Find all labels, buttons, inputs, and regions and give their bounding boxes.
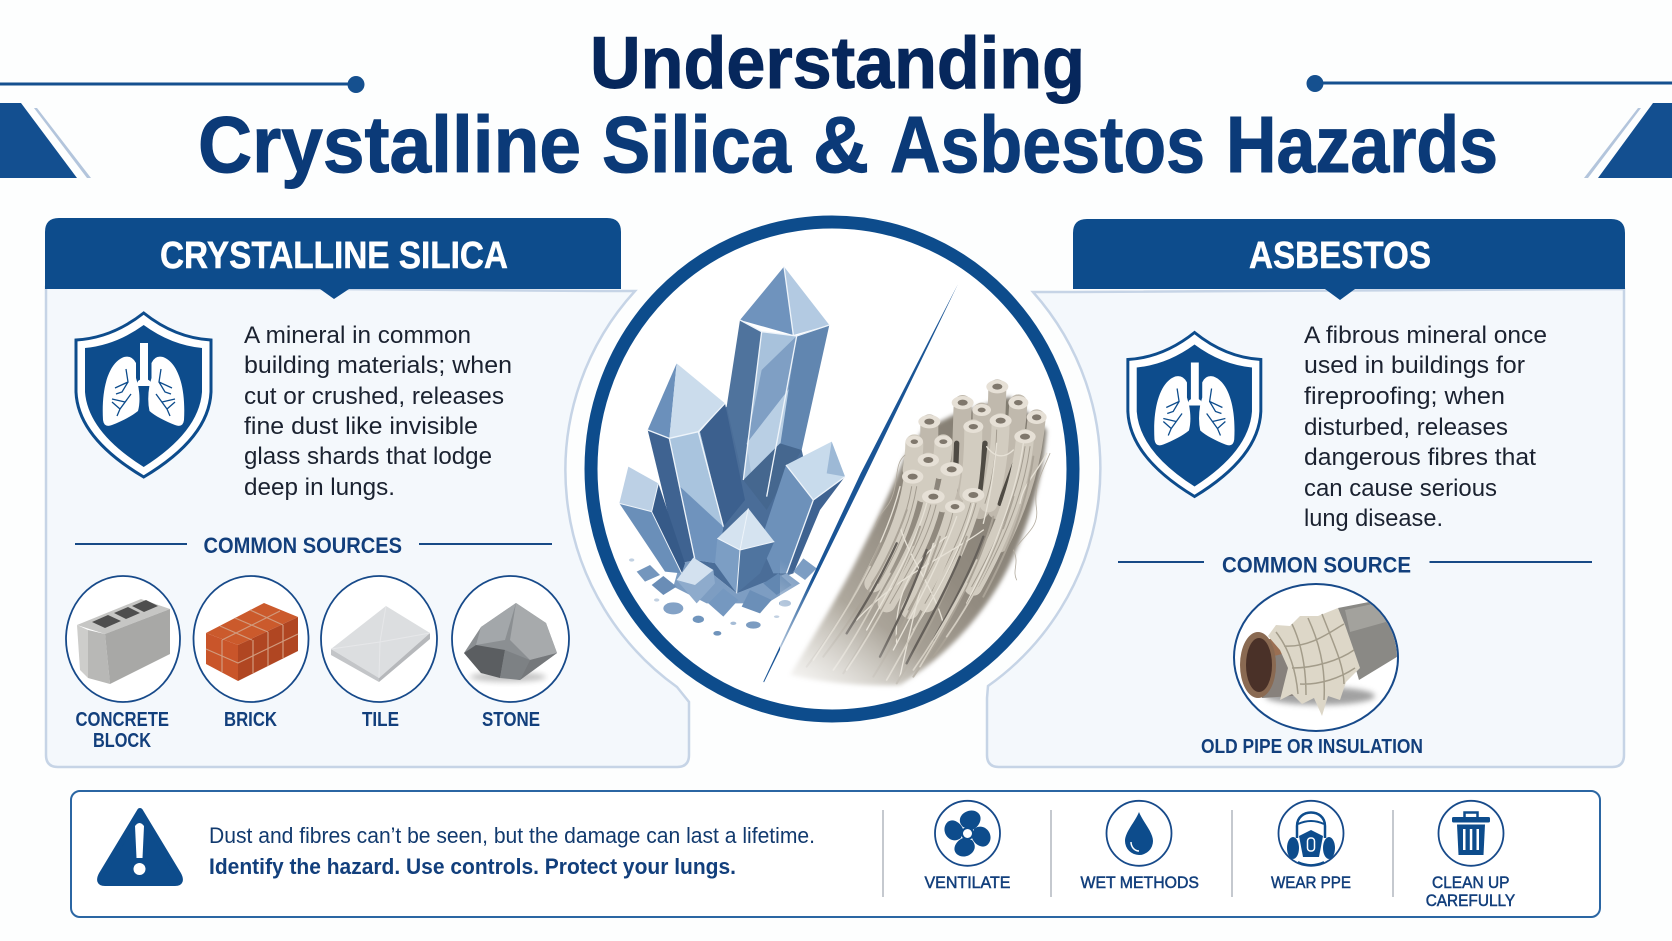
label: BLOCK xyxy=(93,730,151,752)
text: silica description: cut or crushed, releases xyxy=(244,383,504,410)
text: asbestos description: lung disease. xyxy=(1304,505,1443,532)
text: silica description: A mineral in common xyxy=(244,322,471,349)
title: Understanding xyxy=(590,23,1085,104)
title: & xyxy=(813,100,869,189)
panel background: asbestos xyxy=(987,289,1624,767)
text: silica description: deep in lungs. xyxy=(244,474,395,501)
divider line xyxy=(763,284,958,682)
label: STONE xyxy=(482,709,540,731)
source: brick xyxy=(194,576,308,731)
text: silica description: glass shards that lodge xyxy=(244,443,492,470)
label: CONCRETE xyxy=(76,709,169,731)
label xyxy=(76,709,169,752)
title: Silica xyxy=(602,100,791,189)
panel: crystalline silica xyxy=(45,218,689,767)
text: silica description: fine dust like invisible xyxy=(244,413,478,440)
label xyxy=(1426,873,1515,910)
text: asbestos description: fireproofing; when xyxy=(1304,383,1505,410)
heading: crystalline silica: CRYSTALLINE SILICA xyxy=(160,235,508,277)
heading: asbestos xyxy=(1073,219,1625,300)
fibre strands xyxy=(833,443,1047,677)
text: silica description xyxy=(244,322,512,501)
icon: ventilate xyxy=(924,801,1010,892)
icon: lung shield xyxy=(76,313,211,477)
callout: bottom banner xyxy=(71,791,1600,917)
bottom fade xyxy=(780,566,924,688)
front crystal xyxy=(717,508,774,550)
panel: asbestos xyxy=(987,219,1625,767)
text: asbestos description: dangerous fibres that xyxy=(1304,444,1536,471)
panel background: silica xyxy=(46,287,689,767)
icon: warning triangle xyxy=(100,811,180,883)
label: VENTILATE xyxy=(924,873,1010,892)
text: warning message xyxy=(209,823,815,879)
heading: crystalline silica xyxy=(45,218,621,299)
text: asbestos description: disturbed, releases xyxy=(1304,414,1508,441)
title: Hazards xyxy=(1226,100,1498,189)
text: warning message: Identify the hazard. Use controls. Protect your lungs. xyxy=(209,854,736,879)
icon: wear ppe xyxy=(1271,801,1351,892)
text: asbestos description: can cause serious xyxy=(1304,475,1497,502)
title xyxy=(198,23,1498,189)
heading: common sources: COMMON SOURCES xyxy=(204,533,402,558)
tube ribs xyxy=(872,430,1030,610)
back tubes xyxy=(927,388,1037,543)
label: WEAR PPE xyxy=(1271,873,1351,892)
front tubes xyxy=(873,422,1025,610)
ring xyxy=(591,222,1073,716)
left header ornament xyxy=(0,76,364,178)
source: concrete block xyxy=(66,576,180,752)
text: asbestos description: used in buildings for xyxy=(1304,352,1525,379)
right crystal xyxy=(760,465,813,573)
illustration: silica crystals xyxy=(619,267,845,636)
illustration: asbestos fibres xyxy=(780,380,1050,697)
big crystal xyxy=(740,267,793,335)
label: BRICK xyxy=(224,709,277,731)
text: silica description: building materials; when xyxy=(244,352,512,379)
crystal mass xyxy=(695,407,813,593)
icon: wet methods xyxy=(1080,801,1199,892)
source: old pipe xyxy=(1201,584,1423,758)
label: TILE xyxy=(362,709,399,731)
text: asbestos description: A fibrous mineral once xyxy=(1304,322,1547,349)
label: CLEAN UP xyxy=(1432,873,1510,892)
circle background xyxy=(591,222,1073,716)
right header ornament xyxy=(1306,75,1672,178)
small left crystal xyxy=(619,467,658,512)
label: WET METHODS xyxy=(1080,873,1199,892)
left mid crystal xyxy=(648,363,677,438)
source: stone xyxy=(452,576,569,731)
icon: lung shield xyxy=(1128,332,1261,496)
heading: asbestos: ASBESTOS xyxy=(1249,235,1431,277)
text: warning message: Dust and fibres can’t be seen, but the damage can last a lifetime. xyxy=(209,823,815,848)
icon: clean up xyxy=(1426,801,1515,910)
tube ends xyxy=(902,380,1047,513)
source: tile xyxy=(321,576,437,731)
text: asbestos description xyxy=(1304,322,1547,532)
title: Crystalline xyxy=(198,100,581,189)
heading: common source: COMMON SOURCE xyxy=(1222,552,1411,578)
small rocks xyxy=(677,558,715,603)
central comparison circle xyxy=(591,222,1073,716)
label: OLD PIPE OR INSULATION xyxy=(1201,736,1423,758)
title: Asbestos xyxy=(890,100,1205,189)
label: CAREFULLY xyxy=(1426,891,1515,910)
